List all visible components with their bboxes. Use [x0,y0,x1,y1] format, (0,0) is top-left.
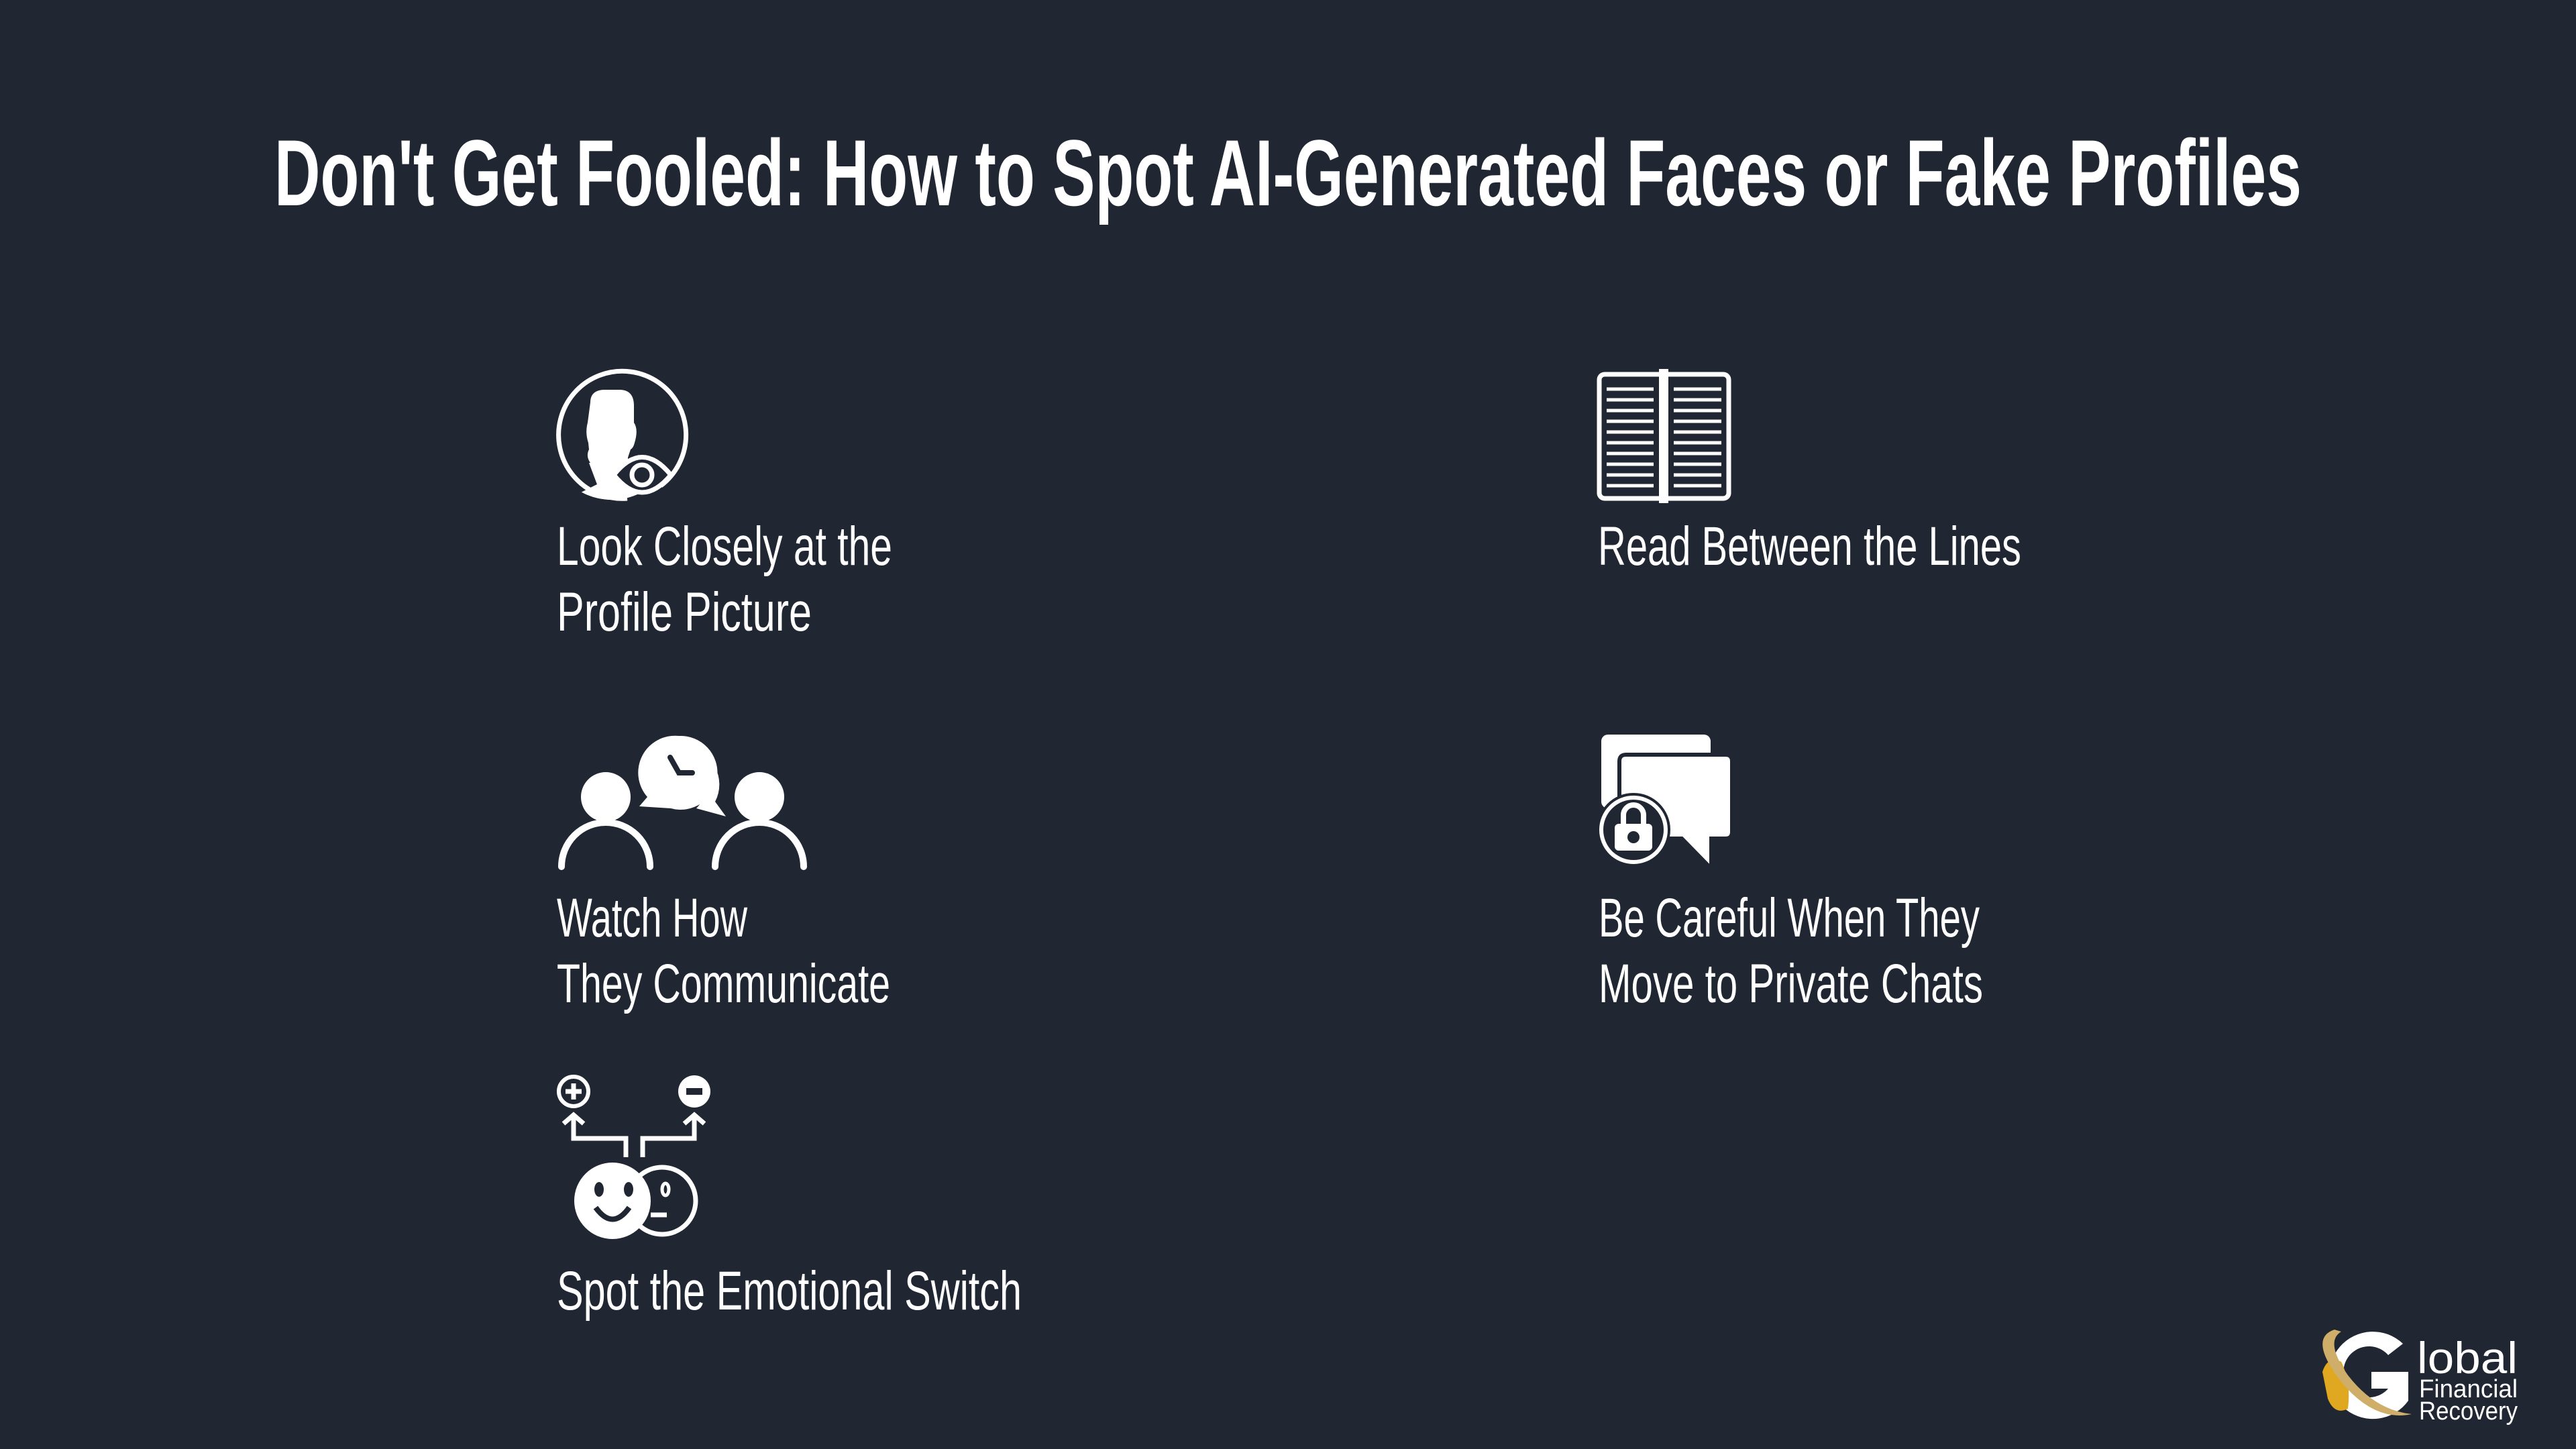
label: spot the emotional switch: Spot the Emotional Switch [557,1260,1022,1322]
logo: Global Financial Recovery: Recovery [2419,1397,2518,1426]
label: read between the lines: Read Between the Lines [1598,516,2021,577]
label: look closely: Look Closely at the [557,516,892,577]
logo: Global Financial Recovery: Financial [2419,1375,2518,1403]
label: watch how they communicate: They Communicate [557,953,890,1014]
label: look closely: Profile Picture [557,582,812,643]
label: look closely [557,516,892,643]
icon: open book [1599,369,1729,503]
icon: two people with chat [561,736,804,867]
label: be careful: Move to Private Chats [1599,953,1983,1014]
icon: chat bubbles with lock [1597,735,1732,869]
logo: Global Financial Recovery [2322,1330,2518,1426]
label: watch how they communicate [557,888,890,1014]
logo: Global Financial Recovery: lobal [2417,1333,2518,1383]
icon: profile with eye [559,371,686,510]
panel: private chats [1597,735,1983,1014]
panel: look closely at profile picture [557,371,892,643]
label: be careful: Be Careful When They [1599,888,1980,949]
label: be careful [1599,888,1983,1014]
label: watch how they communicate: Watch How [557,888,748,949]
panel: read between the lines [1598,369,2021,577]
icon: emotion faces with plus/minus [559,1075,710,1239]
panel: emotional switch [557,1075,1022,1322]
panel: watch how they communicate [557,736,890,1014]
